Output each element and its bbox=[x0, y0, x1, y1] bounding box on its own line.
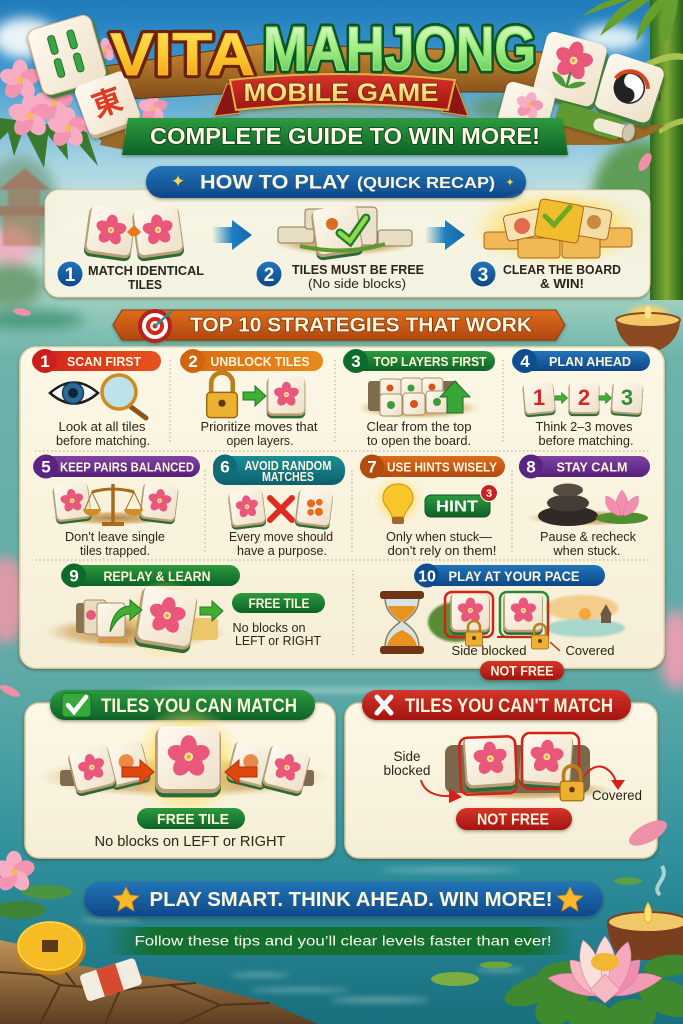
step 2 label: 2 bbox=[264, 265, 274, 286]
caption 5 bbox=[65, 529, 165, 558]
caption 4 bbox=[536, 419, 634, 448]
caption 2: open layers. bbox=[226, 433, 294, 448]
tile: small blossom bbox=[494, 80, 556, 145]
heading pill: how to play: HOW TO PLAY bbox=[200, 172, 350, 194]
tile: bamboo bbox=[26, 13, 111, 101]
icon: mismatched tiles with cross bbox=[227, 489, 334, 530]
free tile tag bbox=[137, 808, 245, 829]
strategy 2: unblock tiles: 2 bbox=[188, 352, 198, 371]
caption 7: Only when stuck— bbox=[386, 529, 492, 544]
icon: numbered tiles bbox=[522, 381, 644, 417]
caption 3: to open the board. bbox=[367, 433, 471, 448]
main title: VITA MAHJONG: MAHJONG bbox=[263, 15, 536, 84]
caption 6 bbox=[229, 529, 333, 558]
strategy 6: avoid random matches: MATCHES bbox=[262, 470, 314, 484]
caption 8: when stuck. bbox=[553, 543, 620, 558]
free tile tag: FREE TILE bbox=[248, 596, 310, 611]
step 2 label: TILES MUST BE FREE bbox=[292, 262, 424, 277]
step 1 label: MATCH IDENTICAL bbox=[88, 263, 204, 278]
caption 7 bbox=[386, 529, 496, 558]
panel: how to play bbox=[45, 166, 650, 297]
icon: hint button: HINT bbox=[436, 498, 478, 516]
footer tip strip bbox=[105, 927, 575, 955]
free tile tag bbox=[232, 593, 325, 613]
strategy 2: unblock tiles: UNBLOCK TILES bbox=[210, 354, 310, 369]
red-banded tile bbox=[79, 957, 143, 1002]
heading banner: top 10 strategies: TOP 10 STRATEGIES THAT WORK bbox=[190, 314, 533, 336]
icon: free tile with arrows bbox=[43, 580, 227, 660]
icon: numbered tiles: 2 bbox=[578, 385, 590, 410]
illustration: free tile between tiles bbox=[38, 706, 328, 818]
step 1 label: 1 bbox=[65, 265, 76, 286]
arrow: step 1 to 2 bbox=[212, 220, 252, 250]
caption 6: have a purpose. bbox=[237, 543, 327, 558]
panel: tiles you can match bbox=[25, 690, 335, 858]
strategy 3: top layers first: TOP LAYERS FIRST bbox=[374, 354, 487, 369]
tile labels: Side blocked bbox=[452, 643, 526, 658]
caption 1 bbox=[56, 419, 150, 448]
caption 2 bbox=[200, 419, 318, 448]
strategy 7: use hints wisely bbox=[360, 454, 505, 558]
not free tag bbox=[456, 808, 572, 830]
heading pill: how to play: (QUICK RECAP) bbox=[357, 175, 495, 192]
strategy 9: replay and learn: REPLAY & LEARN bbox=[104, 569, 210, 584]
icon: blocked tiles with frames and locks bbox=[445, 592, 560, 651]
strategy 7: use hints wisely: 7 bbox=[367, 458, 377, 476]
icon: sunset landscape bbox=[428, 595, 625, 642]
candle top right bbox=[616, 305, 680, 352]
main title: VITA MAHJONG bbox=[110, 15, 536, 88]
strategy 1: scan first: 1 bbox=[40, 352, 50, 371]
strategy 8: stay calm bbox=[519, 454, 650, 558]
icon: lock and tile bbox=[207, 373, 305, 418]
icon: star left bbox=[113, 887, 139, 911]
strategy 6: avoid random matches: 6 bbox=[220, 458, 230, 476]
side blocked label: Side bbox=[394, 748, 421, 764]
header: tiles you can match: TILES YOU CAN MATCH bbox=[101, 696, 297, 717]
strategy 8: stay calm: 8 bbox=[526, 458, 536, 476]
corner mahjong tiles right bbox=[494, 30, 668, 145]
caption 1: Look at all tiles bbox=[58, 419, 146, 434]
icon: balance scale with tiles bbox=[50, 482, 179, 525]
strategy 4: plan ahead: PLAN AHEAD bbox=[549, 354, 631, 369]
bamboo and leaves top right bbox=[582, 0, 683, 300]
subtitle ribbon: mobile game: MOBILE GAME bbox=[244, 79, 438, 107]
free tile explanation: LEFT or RIGHT bbox=[235, 633, 321, 648]
strategy 2: unblock tiles bbox=[180, 349, 323, 448]
header: tiles you can match bbox=[50, 690, 315, 720]
tile: yin yang bbox=[592, 52, 668, 129]
free tile explanation bbox=[232, 620, 321, 648]
icon: hourglass bbox=[380, 591, 424, 654]
caption 4: Think 2–3 moves bbox=[536, 419, 633, 434]
strategy 6: avoid random matches bbox=[213, 454, 345, 558]
caption 5: tiles trapped. bbox=[80, 543, 150, 558]
heading pill: how to play bbox=[146, 166, 526, 198]
caption 6: Every move should bbox=[229, 529, 333, 544]
icon: eye and magnifier bbox=[50, 375, 146, 418]
header: tiles you can't match bbox=[362, 690, 631, 720]
caption 8: Pause & recheck bbox=[540, 529, 636, 544]
side blocked label: blocked bbox=[384, 762, 430, 778]
footer tip strip: Follow these tips and you’ll clear levels faster than ever! bbox=[134, 932, 552, 948]
caption 8 bbox=[540, 529, 636, 558]
step 3 label: CLEAR THE BOARD bbox=[503, 262, 621, 277]
pagoda in background bbox=[0, 168, 55, 246]
title wooden beam bbox=[100, 44, 665, 150]
strategy 10: play at your pace bbox=[380, 564, 625, 680]
strategy 5: keep pairs balanced: 5 bbox=[41, 458, 51, 476]
tile labels: Covered bbox=[566, 643, 614, 658]
green ribbon: complete guide: COMPLETE GUIDE TO WIN MORE! bbox=[150, 123, 540, 149]
caption 2: Prioritize moves that bbox=[200, 419, 318, 434]
header: tiles you can't match: TILES YOU CAN'T MATCH bbox=[405, 696, 613, 717]
step 3 illustration: golden cleared board bbox=[467, 188, 647, 268]
strategy 9: replay and learn bbox=[43, 564, 325, 660]
step 3 label: & WIN! bbox=[540, 276, 584, 291]
corner mahjong tiles left bbox=[26, 13, 143, 141]
main title: VITA MAHJONG: VITA bbox=[110, 21, 255, 88]
strategy 4: plan ahead: 4 bbox=[520, 352, 530, 371]
side blocked label bbox=[384, 748, 430, 778]
free tile tag: FREE TILE bbox=[157, 811, 229, 828]
rocks bottom left bbox=[0, 940, 318, 1024]
top blossoms left bbox=[0, 38, 169, 168]
heading pill: how to play: ✦ bbox=[505, 177, 515, 189]
candle bottom right bbox=[607, 866, 683, 960]
main title: VITA MAHJONG: VITA bbox=[110, 21, 255, 88]
not free tag: NOT FREE bbox=[490, 664, 554, 678]
strategy 5: keep pairs balanced bbox=[33, 454, 200, 558]
footer slogan banner: PLAY SMART. THINK AHEAD. WIN MORE! bbox=[150, 889, 552, 911]
icon: numbered tiles: 1 bbox=[533, 385, 545, 410]
tile: flower with stem bbox=[531, 30, 610, 112]
strategy 3: top layers first bbox=[343, 349, 495, 448]
lily pads and blossom bottom left bbox=[0, 851, 642, 986]
strategy 1: scan first: SCAN FIRST bbox=[67, 354, 141, 369]
icon: stones and lotus bbox=[526, 484, 650, 526]
not free tag bbox=[480, 661, 564, 680]
panel: strategies bbox=[20, 347, 664, 680]
main title: VITA MAHJONG: MAHJONG bbox=[263, 15, 536, 84]
covered label: Covered bbox=[592, 787, 642, 803]
illustration: blocked tiles bbox=[421, 731, 625, 803]
heading banner: top 10 strategies bbox=[113, 310, 565, 341]
step 3 label: 3 bbox=[478, 265, 488, 286]
caption 1: before matching. bbox=[56, 433, 150, 448]
strategy 5: keep pairs balanced: KEEP PAIRS BALANCED bbox=[60, 460, 194, 474]
step 1 label bbox=[57, 261, 204, 292]
caption 5: Don't leave single bbox=[65, 529, 165, 544]
footer slogan banner bbox=[84, 882, 603, 917]
tile labels bbox=[452, 643, 614, 658]
strategy 4: plan ahead bbox=[512, 349, 650, 448]
free tile explanation: No blocks on bbox=[232, 620, 306, 635]
caption 4: before matching. bbox=[538, 433, 634, 448]
step 1 label: TILES bbox=[128, 277, 162, 292]
step 2 label bbox=[256, 261, 424, 291]
strategy 1: scan first bbox=[32, 349, 161, 448]
icon: hint button: 3 bbox=[486, 488, 492, 500]
strategy 6: avoid random matches: AVOID RANDOM bbox=[244, 459, 332, 473]
caption 7: don't rely on them! bbox=[388, 543, 496, 558]
caption 3 bbox=[366, 419, 472, 448]
icon: light bulb bbox=[372, 474, 424, 526]
step 2 label: (No side blocks) bbox=[308, 276, 406, 291]
heading pill: how to play: ✦ bbox=[171, 172, 185, 191]
strategy 10: play at your pace: PLAY AT YOUR PACE bbox=[448, 569, 580, 584]
icon: numbered tiles: 3 bbox=[621, 385, 633, 410]
lotus flower bottom right bbox=[500, 936, 683, 1024]
green ribbon: complete guide bbox=[122, 118, 568, 155]
step 3 label bbox=[470, 261, 621, 291]
step 1 illustration: matching tiles bbox=[83, 205, 185, 262]
strategy 8: stay calm: STAY CALM bbox=[556, 460, 628, 474]
free tile explanation: No blocks on LEFT or RIGHT bbox=[94, 833, 286, 850]
icon: stacked tiles and up arrow bbox=[356, 378, 480, 419]
step 2 illustration: free tile with check bbox=[273, 204, 417, 261]
tile: red character: 東 bbox=[88, 83, 127, 124]
panel: tiles you can't match bbox=[345, 690, 657, 858]
not free tag: NOT FREE bbox=[477, 812, 549, 828]
strategy 3: top layers first: 3 bbox=[351, 352, 361, 371]
strategy 7: use hints wisely: USE HINTS WISELY bbox=[387, 460, 497, 474]
caption 3: Clear from the top bbox=[366, 419, 472, 434]
icon: star right bbox=[557, 887, 583, 911]
arrow: step 2 to 3 bbox=[425, 220, 465, 250]
subtitle ribbon: mobile game bbox=[214, 74, 468, 116]
strategy 10: play at your pace: 10 bbox=[418, 568, 436, 586]
icon: hint button bbox=[425, 484, 498, 517]
bamboo scroll bbox=[554, 102, 637, 145]
strategy 9: replay and learn: 9 bbox=[69, 566, 79, 586]
gold coin bbox=[16, 921, 86, 975]
drifting petals bbox=[0, 151, 671, 851]
